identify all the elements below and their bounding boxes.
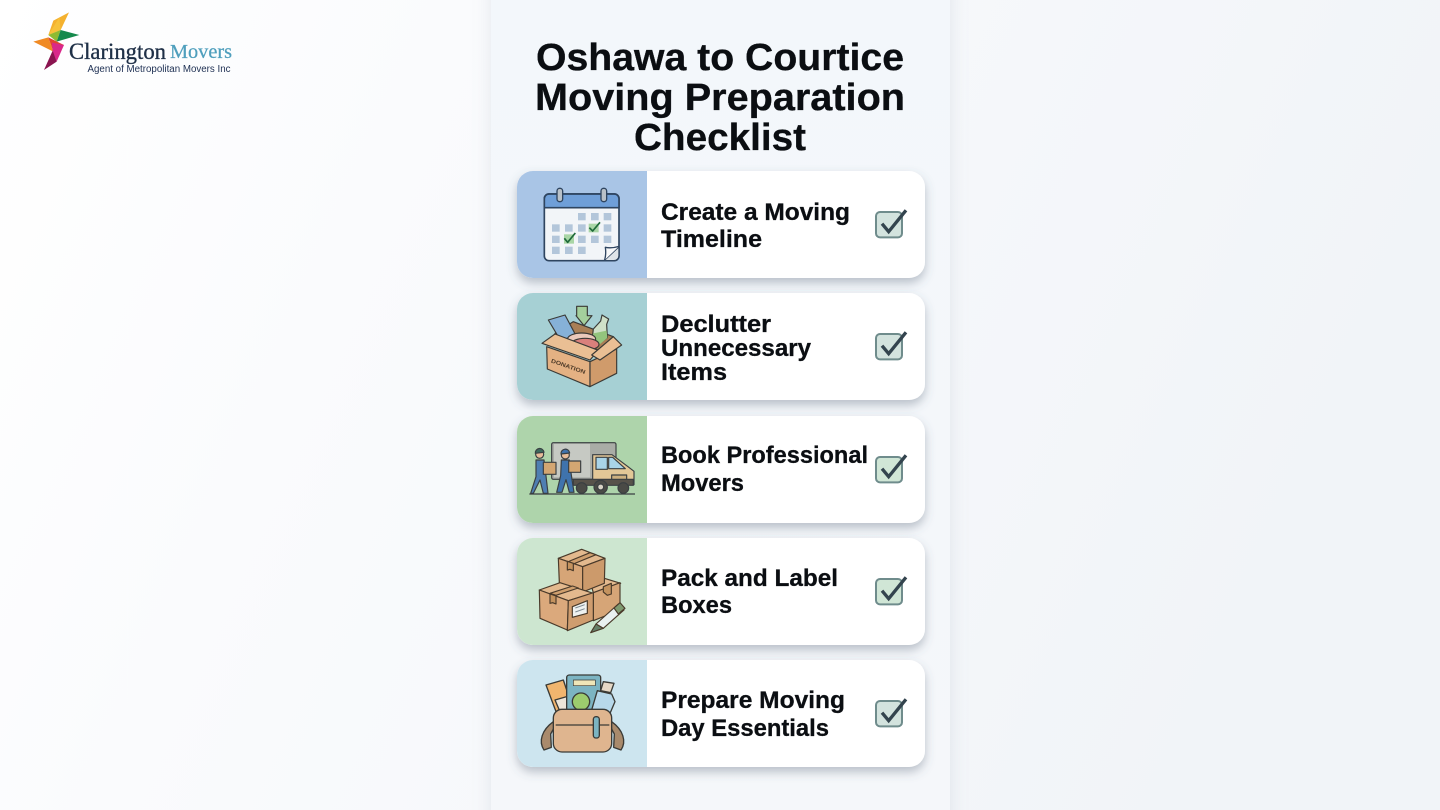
logo word: Movers: Movers: [170, 41, 232, 63]
title: Checklist: [634, 117, 806, 159]
icon: logo star: [33, 12, 79, 70]
logo tagline: Agent of Metropolitan Movers Inc: [88, 64, 230, 75]
card 2 text: Items: [661, 359, 727, 386]
card 1 text: Timeline: [661, 226, 762, 253]
icon: checkbox 3: [876, 455, 906, 482]
icon: moving truck and movers: [529, 443, 635, 494]
card 4 text: Pack and Label: [661, 565, 838, 592]
logo: Clarington Movers: [33, 12, 232, 75]
icon: donation box: [542, 306, 622, 387]
panel: card 3 book professional movers: [517, 416, 925, 523]
card 3 text: Book Professional: [661, 442, 868, 469]
card 1 text: Create a Moving: [661, 199, 850, 226]
card 1 text: [661, 199, 850, 253]
title: Oshawa to Courtice: [536, 37, 904, 79]
card 4 text: [661, 565, 838, 619]
icon: checkbox 2: [876, 332, 906, 359]
panel: card 2 declutter unnecessary items: [517, 293, 925, 400]
panel: checklist column: [491, 0, 950, 810]
icon: essentials bag: [541, 675, 624, 752]
logo wordmark: Clarington: [69, 39, 166, 64]
title: [535, 37, 905, 159]
panel: card 4 pack and label boxes: [517, 538, 925, 645]
card 2 text: Unnecessary: [661, 335, 812, 362]
card 4 text: Boxes: [661, 592, 732, 619]
panel: card 5 prepare moving day essentials: [517, 660, 925, 767]
card 2 text: Declutter: [661, 311, 771, 338]
card 5 text: Prepare Moving: [661, 687, 845, 714]
icon: checkbox 5: [876, 699, 906, 726]
card 3 text: [661, 442, 868, 497]
title: Moving Preparation: [535, 77, 905, 119]
card 5 text: Day Essentials: [661, 715, 829, 742]
icon: calendar: [544, 188, 619, 261]
card 5 text: [661, 687, 845, 742]
card 2 text: [661, 311, 812, 386]
icon: checkbox 1: [876, 210, 906, 237]
icon: donation box: DONATION: [550, 359, 586, 376]
icon: stacked boxes and marker: [539, 549, 625, 633]
card 3 text: Movers: [661, 470, 744, 497]
icon: checkbox 4: [876, 577, 906, 604]
panel: card 1 create a moving timeline: [517, 171, 925, 278]
